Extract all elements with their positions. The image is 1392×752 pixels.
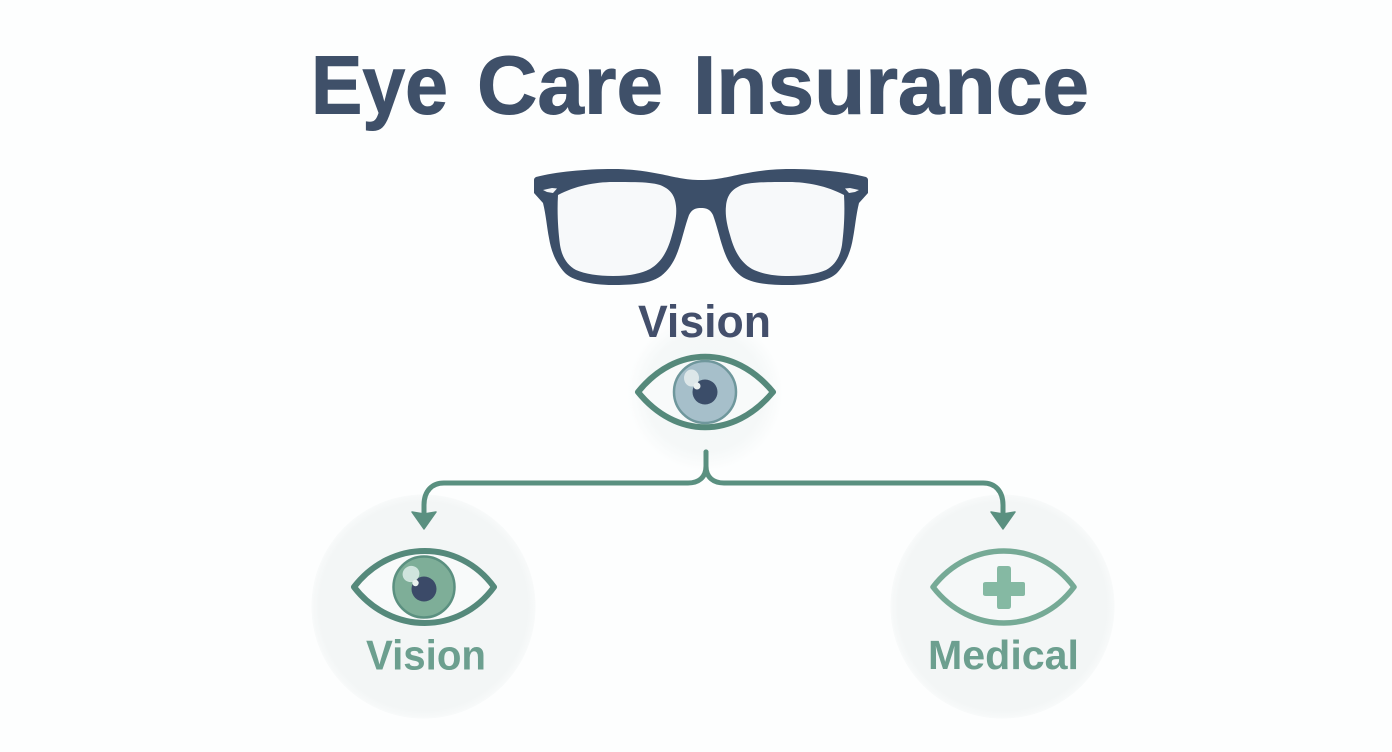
title: Care <box>477 38 663 132</box>
panel: medical coverage <box>890 494 1114 718</box>
title: Eye <box>311 38 448 132</box>
panel: vision coverage <box>312 494 536 718</box>
icon: central eye <box>638 357 773 427</box>
title <box>311 38 1089 132</box>
icon: eye with medical cross <box>933 551 1074 623</box>
label: Vision: Vision <box>366 632 486 678</box>
icon: green eye <box>354 551 494 623</box>
icon: glasses <box>534 169 868 285</box>
title: Insurance <box>693 38 1089 132</box>
halo behind central eye <box>627 315 783 471</box>
label: Vision (top): Vision <box>638 296 771 347</box>
connector: branching arrows <box>412 452 1015 529</box>
label: Medical: Medical <box>928 632 1079 678</box>
